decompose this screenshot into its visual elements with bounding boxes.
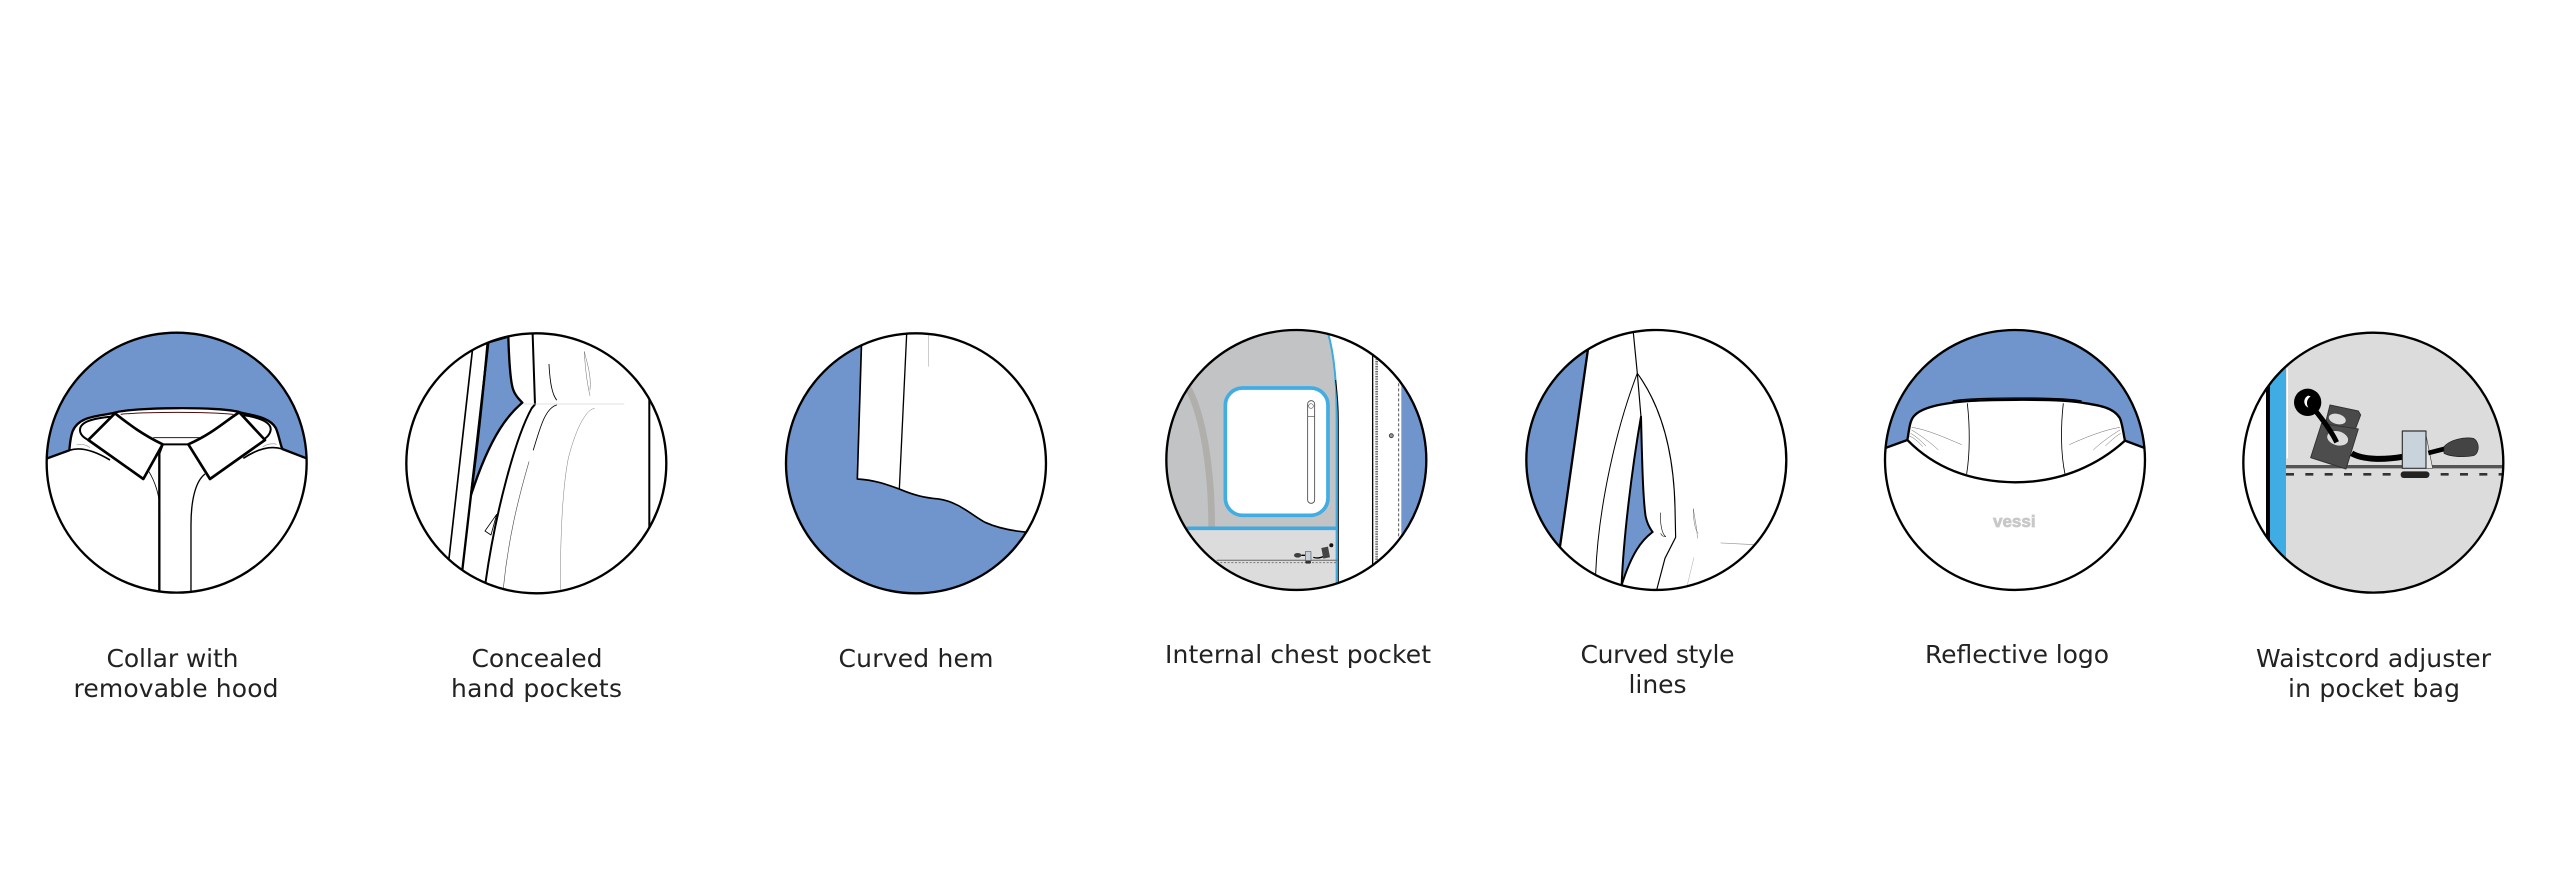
panel: internal chest pocket — [1160, 320, 1440, 669]
panel: collar with removable hood — [46, 332, 308, 698]
label: pockets: hand pockets — [451, 674, 622, 703]
label: hem: Curved hem — [838, 644, 994, 673]
label: collar: removable hood — [74, 674, 278, 703]
panel: waistcord adjuster — [2240, 325, 2520, 703]
icon: hood back with logo — [1884, 328, 2146, 592]
icon: collar — [46, 332, 308, 594]
label: style lines — [1580, 640, 1734, 699]
feature infographic — [46, 328, 2504, 702]
label: collar — [74, 644, 278, 703]
label: adjuster: in pocket bag — [2288, 674, 2460, 703]
label: logo: Reflective logo — [1925, 640, 2109, 669]
icon: hand pocket — [405, 332, 668, 594]
label: pockets — [451, 644, 622, 703]
panel: reflective logo — [1884, 328, 2146, 668]
label: style lines: lines — [1628, 670, 1686, 699]
label: chest pocket: Internal chest pocket — [1165, 640, 1431, 669]
label: pockets: Concealed — [472, 644, 602, 673]
panel: curved style lines — [1525, 328, 1788, 694]
label: adjuster — [2256, 644, 2492, 703]
panel: concealed hand pockets — [395, 325, 675, 703]
logo text: vessi — [1993, 512, 2036, 531]
icon: cord adjuster — [2242, 332, 2504, 594]
icon: mini adjuster — [1294, 543, 1333, 564]
icon: chest pocket — [1165, 328, 1428, 592]
label: style lines: Curved style — [1580, 640, 1734, 669]
panel: curved hem — [784, 332, 1048, 668]
label: adjuster: Waistcord adjuster — [2256, 644, 2492, 673]
icon: style lines — [1525, 328, 1788, 592]
label: collar: Collar with — [106, 644, 238, 673]
icon: curved hem — [784, 332, 1048, 594]
